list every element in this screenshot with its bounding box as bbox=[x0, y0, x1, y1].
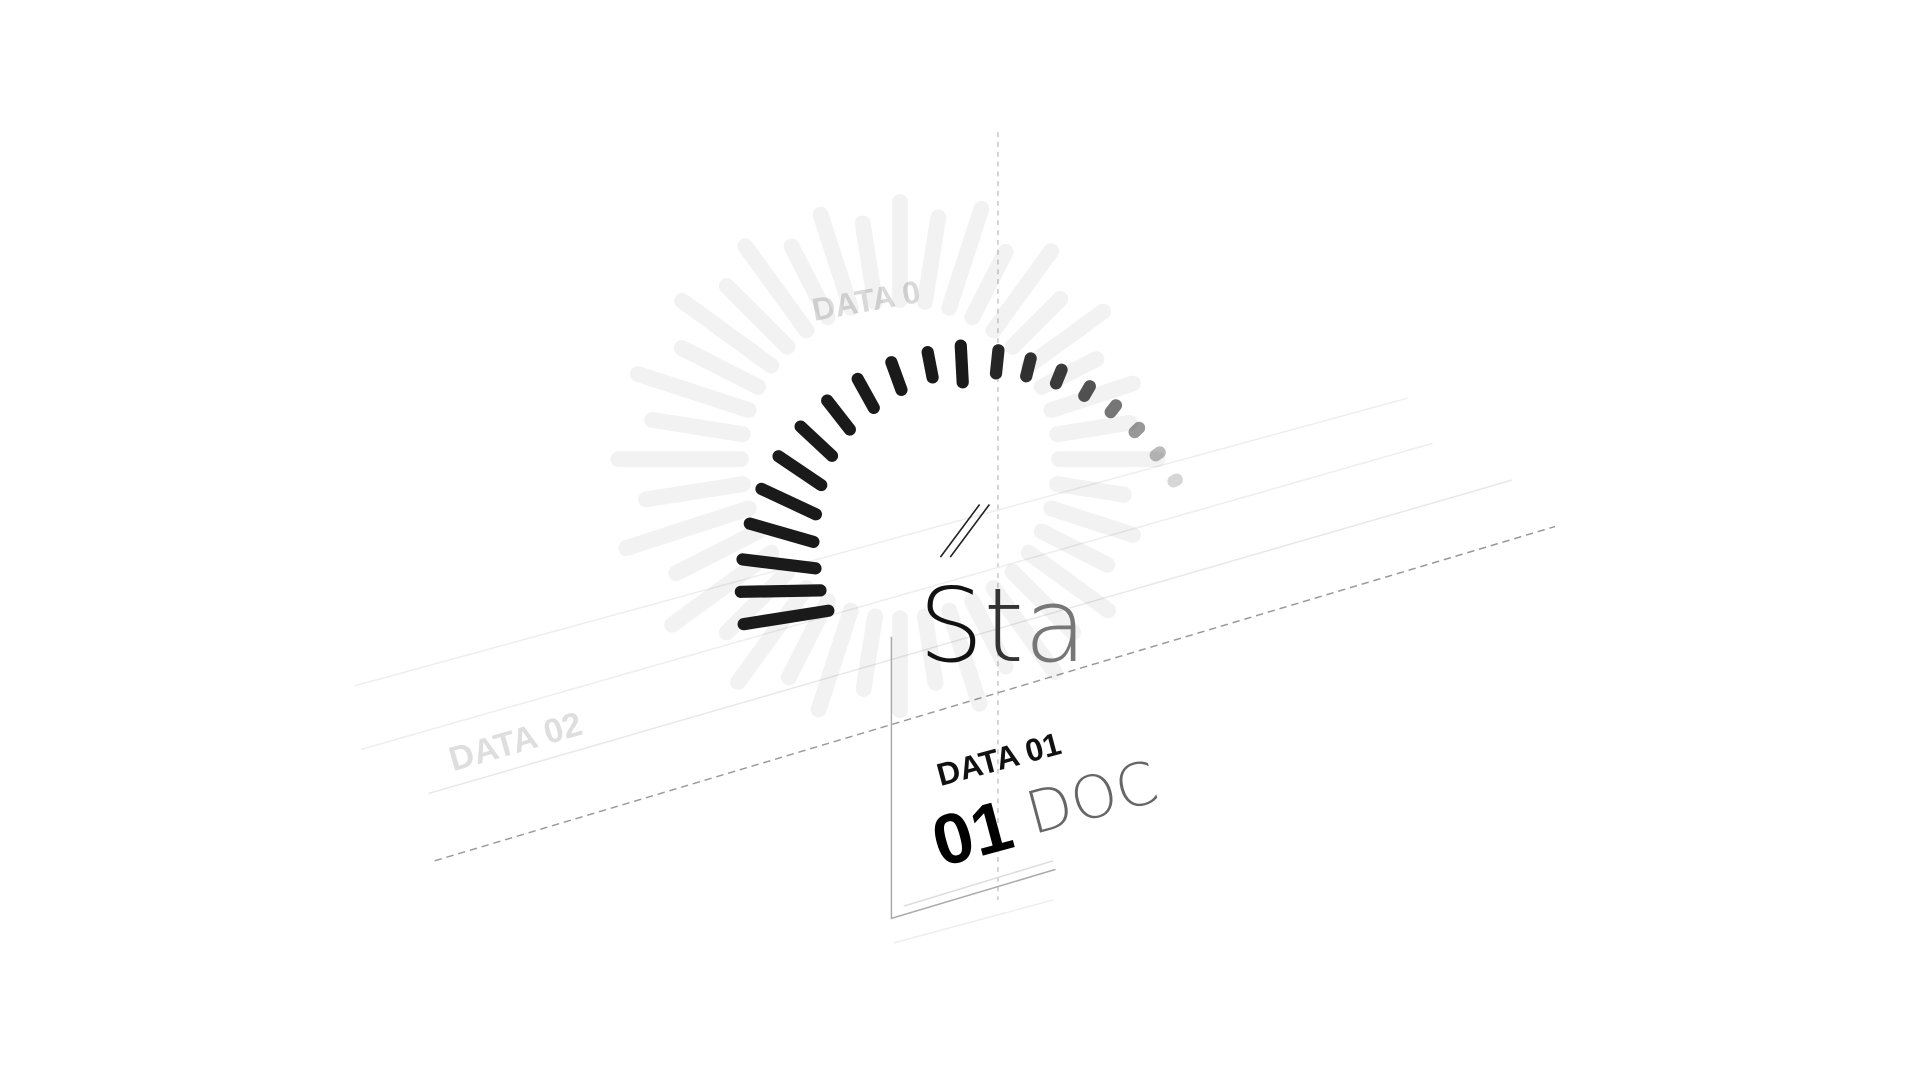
big number 01 DOC bbox=[924, 746, 1167, 882]
bracket frame bbox=[891, 637, 1056, 943]
big number 01 DOC: 01 bbox=[924, 786, 1021, 882]
big number 01 DOC: DOC bbox=[1019, 747, 1165, 848]
background ray circle bbox=[618, 202, 1157, 710]
title text: Sta bbox=[918, 567, 1087, 686]
label DATA 01: DATA 01 bbox=[933, 725, 1065, 793]
slash marks bbox=[940, 504, 989, 557]
guide lines bbox=[355, 132, 1555, 900]
faint label top: DATA 0 bbox=[809, 273, 923, 328]
faint label DATA 02: DATA 02 bbox=[445, 705, 586, 779]
dark progress arc of dashes bbox=[741, 346, 1177, 624]
